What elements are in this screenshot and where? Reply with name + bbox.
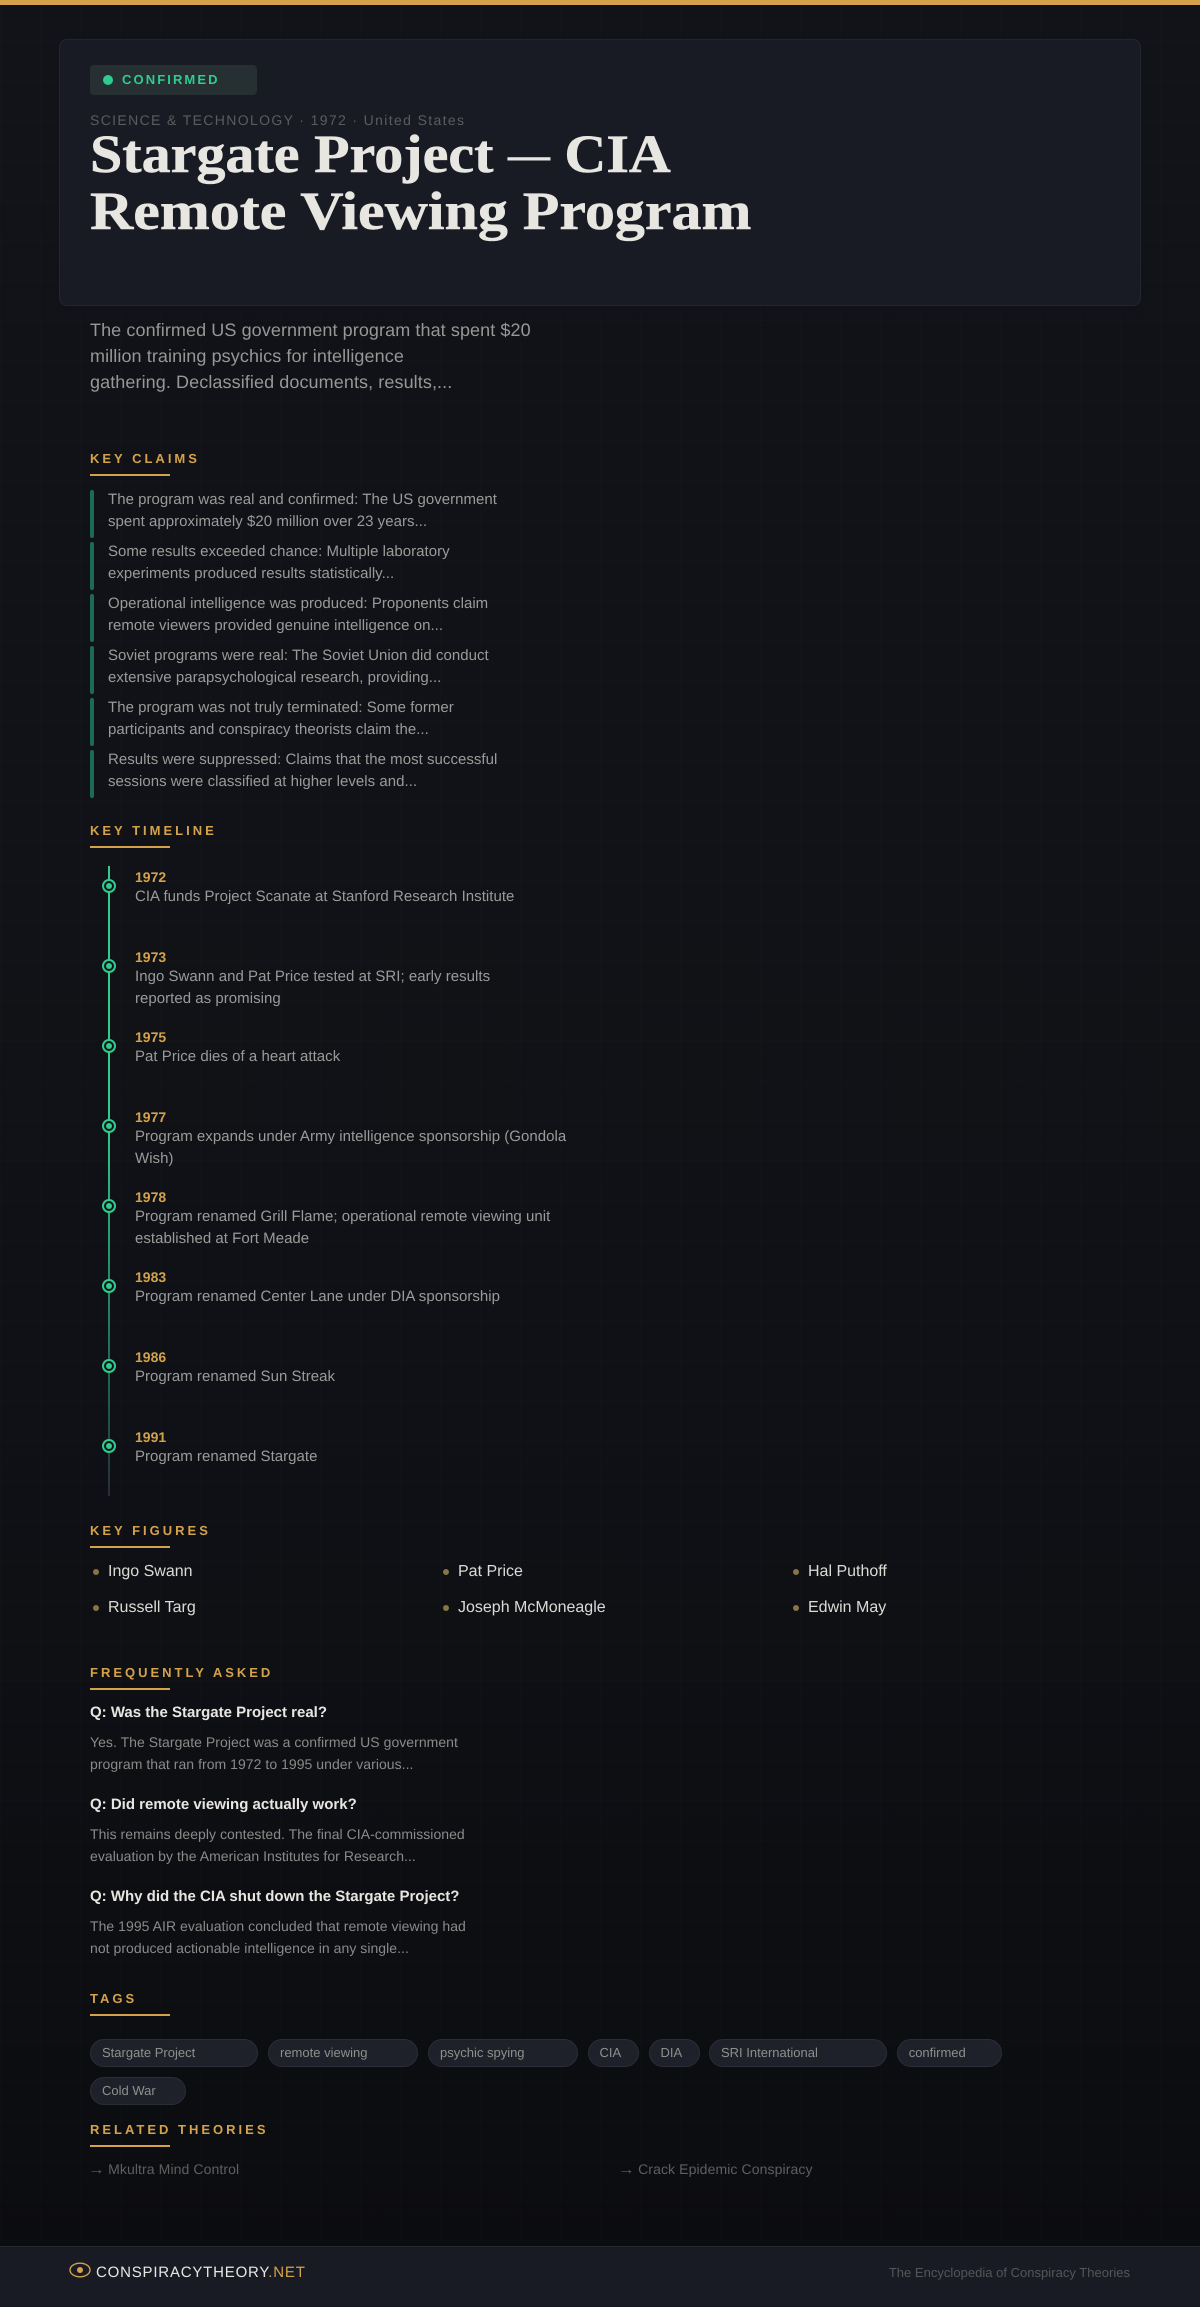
claim 1 <box>90 490 497 538</box>
tag: psychic spying <box>440 2045 525 2060</box>
faq 1: Q: Was the Stargate Project real? <box>90 1704 327 1721</box>
claim 1: The program was real and confirmed: The US government <box>108 491 497 508</box>
claim 6: sessions were classified at higher levels and... <box>108 773 417 790</box>
event 1991: Program renamed Stargate <box>135 1448 317 1465</box>
claim 4 <box>90 646 489 694</box>
event 1978: established at Fort Meade <box>135 1230 309 1247</box>
event 1983: Program renamed Center Lane under DIA sponsorship <box>135 1288 500 1305</box>
tag: remote viewing <box>280 2045 367 2060</box>
event 1978: 1978 <box>135 1189 166 1205</box>
heading: frequently asked: FREQUENTLY ASKED <box>90 1665 273 1680</box>
tag: CIA <box>600 2045 621 2060</box>
summary: million training psychics for intelligence <box>90 346 404 366</box>
wordmark: CONSPIRACYTHEORY.NET <box>96 2264 306 2281</box>
event 1973: 1973 <box>135 949 166 965</box>
event 1986 <box>102 1349 335 1385</box>
claim 6 <box>90 750 497 798</box>
event 1983 <box>102 1269 500 1305</box>
heading: tags: TAGS <box>90 1991 137 2006</box>
tag <box>90 2077 186 2105</box>
tag <box>268 2039 418 2067</box>
claim 5: The program was not truly terminated: Some former <box>108 699 454 716</box>
claim 2: Some results exceeded chance: Multiple laboratory <box>108 543 450 560</box>
title: Stargate Project — CIA <box>90 124 671 184</box>
claim 6: Results were suppressed: Claims that the most successful <box>108 751 497 768</box>
tag <box>709 2039 887 2067</box>
figure: Joseph McMoneagle: Joseph McMoneagle <box>458 1599 606 1616</box>
heading: key timeline: KEY TIMELINE <box>90 823 217 838</box>
faq 1: Yes. The Stargate Project was a confirmed US government <box>90 1734 458 1750</box>
tag <box>428 2039 578 2067</box>
figure: Edwin May: Edwin May <box>808 1599 886 1616</box>
claim 3 <box>90 594 488 642</box>
faq 3: Q: Why did the CIA shut down the Stargate Project? <box>90 1888 459 1905</box>
event 1973: reported as promising <box>135 990 281 1007</box>
tag: SRI International <box>721 2045 818 2060</box>
figure: Russell Targ: Russell Targ <box>108 1599 196 1616</box>
heading: related theories: RELATED THEORIES <box>90 2122 268 2137</box>
claim 5 <box>90 698 454 746</box>
event 1986: 1986 <box>135 1349 166 1365</box>
event 1991 <box>102 1429 317 1465</box>
figure: Pat Price: Pat Price <box>458 1563 523 1580</box>
claim 4: Soviet programs were real: The Soviet Union did conduct <box>108 647 489 664</box>
key figures list <box>93 1563 887 1616</box>
tag <box>648 2039 700 2067</box>
tagline: The Encyclopedia of Conspiracy Theories <box>889 2265 1130 2280</box>
event 1991: 1991 <box>135 1429 166 1445</box>
claim 1: spent approximately $20 million over 23 years... <box>108 513 427 530</box>
event 1986: Program renamed Sun Streak <box>135 1368 335 1385</box>
status badge: confirmed: CONFIRMED <box>122 72 220 87</box>
related theory link: → <box>88 2161 105 2177</box>
status badge: confirmed <box>90 65 257 95</box>
faq 2: This remains deeply contested. The final CIA-commissioned <box>90 1826 465 1842</box>
title: Remote Viewing Program <box>90 181 751 241</box>
top accent bar <box>0 0 1200 5</box>
event 1978: Program renamed Grill Flame; operational remote viewing unit <box>135 1208 550 1225</box>
event 1975: Pat Price dies of a heart attack <box>135 1048 340 1065</box>
tag <box>90 2039 258 2067</box>
related theory link: Crack Epidemic Conspiracy <box>638 2161 813 2177</box>
footer <box>0 2246 1200 2307</box>
related theory link: Mkultra Mind Control <box>108 2161 239 2177</box>
timeline <box>102 866 566 1496</box>
heading: key figures: KEY FIGURES <box>90 1523 211 1538</box>
faq 2 <box>90 1796 465 1864</box>
icon: eye logo <box>69 2262 91 2278</box>
event 1972: 1972 <box>135 869 166 885</box>
claim 4: extensive parapsychological research, providing... <box>108 669 441 686</box>
heading: key claims: KEY CLAIMS <box>90 451 200 466</box>
faq 3: not produced actionable intelligence in any single... <box>90 1940 409 1956</box>
tag <box>897 2039 1002 2067</box>
event 1975: 1975 <box>135 1029 166 1045</box>
summary: The confirmed US government program that spent $20 <box>90 320 531 340</box>
related theory link: → <box>618 2161 635 2177</box>
event 1983: 1983 <box>135 1269 166 1285</box>
event 1977: 1977 <box>135 1109 166 1125</box>
figure: Hal Puthoff: Hal Puthoff <box>808 1563 887 1580</box>
panel: key claims <box>90 490 497 798</box>
event 1975 <box>102 1029 340 1065</box>
event 1978 <box>102 1189 550 1247</box>
event 1973 <box>102 949 490 1007</box>
event 1973: Ingo Swann and Pat Price tested at SRI; early results <box>135 968 490 985</box>
tag: DIA <box>660 2045 682 2060</box>
claim 2 <box>90 542 450 590</box>
claim 5: participants and conspiracy theorists claim the... <box>108 721 429 738</box>
faq 2: evaluation by the American Institutes for Research... <box>90 1848 416 1864</box>
claim 3: remote viewers provided genuine intelligence on... <box>108 617 443 634</box>
summary: gathering. Declassified documents, results,... <box>90 372 452 392</box>
hero panel <box>59 39 1141 306</box>
title <box>90 124 751 242</box>
summary <box>90 320 531 392</box>
tag: Cold War <box>102 2083 156 2098</box>
event 1972 <box>102 869 514 905</box>
event 1977 <box>102 1109 566 1167</box>
tag <box>588 2039 638 2067</box>
figure: Ingo Swann: Ingo Swann <box>108 1563 193 1580</box>
tag: Stargate Project <box>102 2045 195 2060</box>
tags <box>90 2039 1002 2105</box>
faq 3 <box>90 1888 466 1956</box>
category meta line: SCIENCE & TECHNOLOGY · 1972 · United States <box>90 112 465 128</box>
event 1972: CIA funds Project Scanate at Stanford Research Institute <box>135 888 514 905</box>
claim 3: Operational intelligence was produced: Proponents claim <box>108 595 488 612</box>
faq 2: Q: Did remote viewing actually work? <box>90 1796 357 1813</box>
claim 2: experiments produced results statistically... <box>108 565 394 582</box>
event 1977: Program expands under Army intelligence sponsorship (Gondola <box>135 1128 566 1145</box>
faq 1 <box>90 1704 458 1772</box>
tag: confirmed <box>909 2045 966 2060</box>
event 1977: Wish) <box>135 1150 173 1167</box>
timeline axis <box>108 866 110 1496</box>
faq 1: program that ran from 1972 to 1995 under various... <box>90 1756 413 1772</box>
faq 3: The 1995 AIR evaluation concluded that remote viewing had <box>90 1918 466 1934</box>
